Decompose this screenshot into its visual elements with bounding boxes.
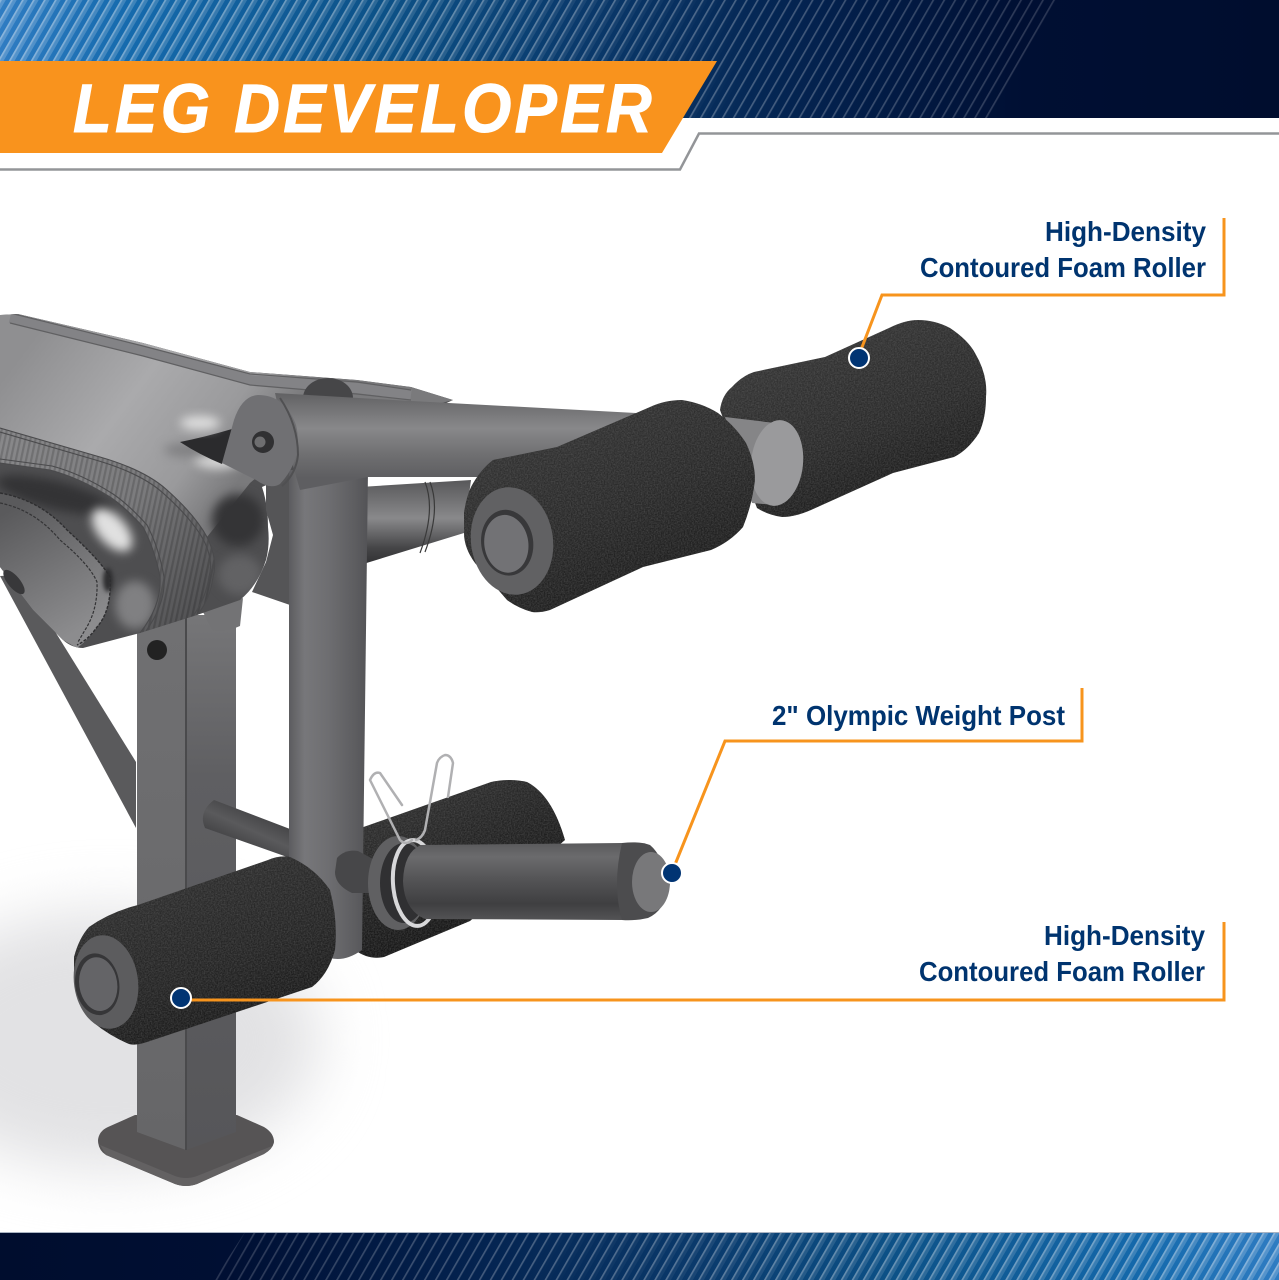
leader line [859,218,1224,355]
pivot plate [222,395,298,486]
brace mount slot [0,567,28,597]
cross rod [203,800,290,858]
marker dot [662,863,682,883]
title banner [0,61,717,153]
marker dot [849,348,869,368]
seat pad [0,313,453,648]
floor shadow [0,910,320,1170]
header band [0,0,1279,118]
seat top surface [0,314,453,537]
leader line [182,922,1224,1000]
spring clip ring [390,839,440,927]
stub shaft [335,851,375,893]
front upper roller end cap [464,482,560,600]
front lower foam roller [74,856,336,1045]
seat front carbon band [0,428,215,633]
label: 2" Olympic Weight Post [772,700,1065,731]
seat side panel [0,493,110,648]
product photo: bench with leg developer [0,313,986,1186]
marker dot [171,988,191,1008]
seat back trim strip [10,318,411,395]
seat notch [180,429,232,464]
support leg [137,615,236,1150]
rear round bracket [303,378,353,418]
header divider line [0,134,1279,170]
leader line [672,688,1082,872]
seat right end shading [212,494,264,546]
pivot bolt [252,431,274,453]
seat notch highlight [180,416,220,430]
rear lower foam roller [355,780,565,958]
front upper foam roller [464,400,755,612]
seat stitching right [420,482,434,553]
label second line: Contoured Foam Roller [919,956,1205,987]
callout: rear upper foam roller [849,216,1224,368]
seat seam shadow [103,568,113,592]
seat side stitching [0,493,110,645]
rear seat section [360,480,471,565]
leg bolt [147,640,167,660]
label: High-Density [1045,216,1206,247]
seat glossy lower body [0,472,114,517]
diagonal brace [0,575,136,828]
footer band [0,1232,1279,1280]
spring clip wires [370,755,453,843]
post side bracket [252,470,290,605]
lower roller end cap [68,931,144,1033]
weight post shaft [403,843,622,920]
weight post end [617,842,670,920]
tube end disc [725,417,807,508]
vertical post [289,470,368,959]
leg base plate [98,1115,274,1186]
label: High-Density [1044,920,1205,951]
callout: weight post [662,688,1082,883]
label second line: Contoured Foam Roller [920,252,1206,283]
collar disc [368,836,428,930]
upper horizontal tube [275,393,650,490]
seat bracket [203,598,243,631]
callout: front lower foam roller [171,920,1224,1008]
rear upper foam roller [720,320,986,517]
title: LEG DEVELOPER [73,71,652,148]
